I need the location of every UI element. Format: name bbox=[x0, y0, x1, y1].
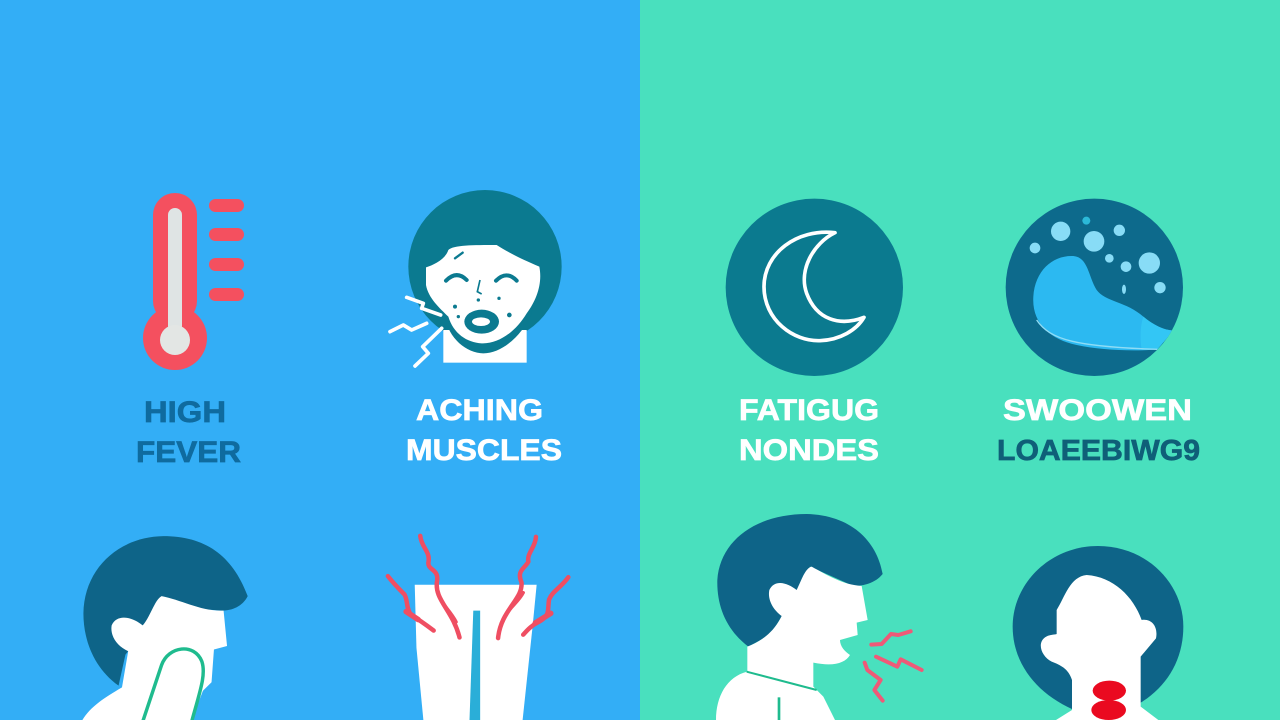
icon: aching face bbox=[390, 190, 562, 366]
figure: man holding throat bbox=[79, 536, 248, 720]
icon: crescent moon bbox=[726, 199, 903, 376]
figure: aching legs bbox=[388, 536, 568, 720]
panel: left blue background bbox=[0, 0, 640, 720]
panel: right green background bbox=[640, 0, 1280, 720]
text: fatigue label: NONDES bbox=[739, 434, 879, 467]
text: aching muscles label: ACHING bbox=[416, 394, 543, 427]
text: garbled sublabel: LOAEEBIWG9 bbox=[997, 435, 1200, 467]
text: high fever label bbox=[136, 396, 241, 469]
icon: cough lines bbox=[865, 631, 922, 701]
figure: man coughing bbox=[716, 514, 922, 720]
text: high fever label: HIGH bbox=[144, 396, 226, 429]
icon: swollen blob with bubbles bbox=[1006, 199, 1183, 376]
text: aching muscles label: MUSCLES bbox=[406, 434, 562, 467]
text: swollen label: SWOOWEN bbox=[1003, 394, 1192, 427]
icon: thermometer bbox=[143, 193, 244, 370]
text: fatigue label: FATIGUG bbox=[739, 394, 879, 427]
text: fatigue label bbox=[739, 394, 879, 467]
text: aching muscles label bbox=[406, 394, 562, 467]
icon: pain lines bbox=[388, 536, 568, 638]
icon: swollen glands bbox=[1091, 681, 1126, 720]
figure: head with swollen neck glands bbox=[1013, 546, 1183, 720]
text: high fever label: FEVER bbox=[136, 436, 241, 469]
